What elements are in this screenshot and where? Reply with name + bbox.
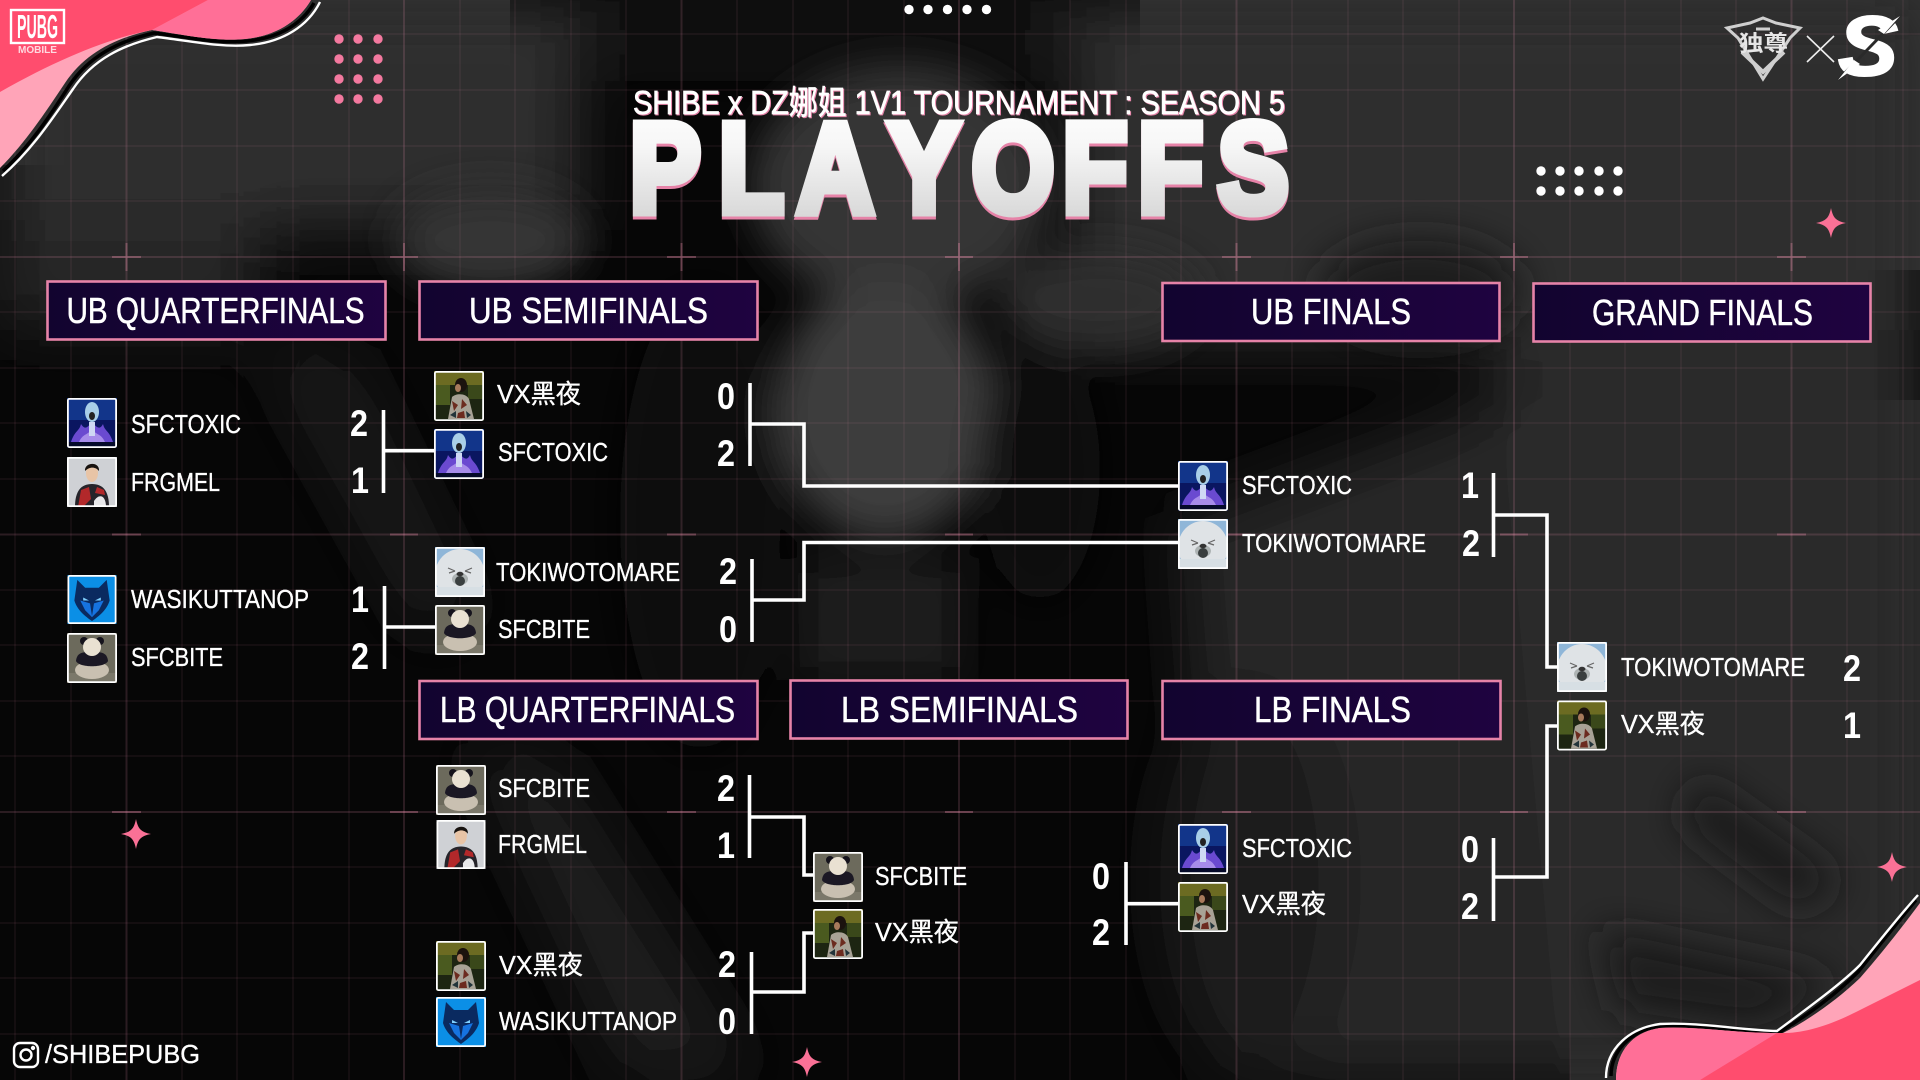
player row: SFCTOXIC: 0 xyxy=(1461,829,1479,870)
player row: TOKIWOTOMARE xyxy=(1178,519,1480,573)
match: LB semifinal xyxy=(813,852,1110,959)
heading: UB Quarterfinals xyxy=(48,282,386,340)
player row: TOKIWOTOMARE: TOKIWOTOMARE xyxy=(1621,652,1805,682)
player row: SFCBITE: 0 xyxy=(1092,856,1110,897)
player row: SFCTOXIC: SFCTOXIC xyxy=(498,437,608,467)
player row: VX黑夜 xyxy=(813,909,1110,959)
match: LB quarterfinal 2 xyxy=(436,941,736,1047)
pink dot grid xyxy=(334,34,383,104)
match: UB quarterfinal 2 xyxy=(67,575,369,683)
player row: SFCBITE: 2 xyxy=(351,636,369,677)
player row: FRGMEL: FRGMEL xyxy=(131,467,220,497)
player row: VX黑夜: 0 xyxy=(717,376,735,417)
player row: VX黑夜: 2 xyxy=(1092,912,1110,953)
logos top-right xyxy=(1727,0,1900,93)
bracket connector lines xyxy=(384,383,1557,1034)
heading: PLAYOFFS shadow and face: PLAYOFFS xyxy=(630,98,1289,239)
player row: VX黑夜: 2 xyxy=(1461,886,1479,927)
player row: WASIKUTTANOP: WASIKUTTANOP xyxy=(499,1006,677,1036)
social handle xyxy=(14,1039,200,1069)
heading: Grand Finals: GRAND FINALS xyxy=(1592,292,1813,333)
player row: FRGMEL: 1 xyxy=(717,825,735,866)
player row: SFCTOXIC: 2 xyxy=(350,403,368,444)
player row: SFCBITE: SFCBITE xyxy=(498,614,590,644)
player row: SFCTOXIC: SFCTOXIC xyxy=(131,409,241,439)
player row: FRGMEL: 1 xyxy=(351,460,369,501)
infographic canvas: PUBG xyxy=(17,8,58,45)
icon: instagram xyxy=(14,1043,38,1067)
player row: SFCBITE: SFCBITE xyxy=(498,773,590,803)
player row: WASIKUTTANOP xyxy=(68,575,369,624)
heading: LB Quarterfinals xyxy=(420,681,758,739)
white dot grid right xyxy=(1536,166,1623,196)
handle text: /SHIBEPUBG xyxy=(45,1039,200,1069)
match: UB semifinal 2 xyxy=(435,547,737,655)
player row: VX黑夜: VX黑夜 xyxy=(1621,709,1705,739)
white dots top xyxy=(904,5,991,14)
match: UB semifinal 1 xyxy=(434,371,735,479)
player row: WASIKUTTANOP: WASIKUTTANOP xyxy=(131,584,309,614)
player row: VX黑夜: VX黑夜 xyxy=(499,950,583,980)
player row: SFCBITE: 0 xyxy=(719,609,737,650)
player row: TOKIWOTOMARE: 2 xyxy=(719,551,737,592)
heading: UB Finals xyxy=(1162,283,1500,341)
heading boxes xyxy=(48,282,1870,739)
player row: FRGMEL xyxy=(436,820,735,869)
player row: VX黑夜 xyxy=(434,371,735,421)
player row: VX黑夜 xyxy=(1178,882,1479,932)
heading: LB Finals xyxy=(1162,681,1500,739)
player row: SFCBITE xyxy=(67,633,369,683)
player row: SFCTOXIC xyxy=(67,398,368,448)
heading: UB Finals: UB FINALS xyxy=(1251,291,1411,332)
match: UB quarterfinal 1 xyxy=(67,398,369,507)
player row: TOKIWOTOMARE: 2 xyxy=(1843,648,1861,689)
player row: SFCTOXIC xyxy=(1178,824,1479,874)
heading: LB Semifinals: LB SEMIFINALS xyxy=(841,689,1078,730)
icon: S logo: S xyxy=(1838,0,1898,93)
icon: emblem xyxy=(1727,18,1800,79)
heading: UB Semifinals xyxy=(420,282,758,340)
heading: PLAYOFFS shadow and face: PLAYOFFS xyxy=(630,101,1289,242)
corner wave bottom-right xyxy=(1606,895,1920,1080)
player row: SFCBITE xyxy=(435,605,737,655)
player row: VX黑夜 xyxy=(1557,700,1861,750)
player row: VX黑夜: 1 xyxy=(1843,705,1861,746)
heading: Grand Finals xyxy=(1534,284,1870,342)
match: UB final xyxy=(1178,461,1480,573)
player row: VX黑夜 xyxy=(436,941,736,991)
player row: FRGMEL: FRGMEL xyxy=(498,829,587,859)
player row: FRGMEL xyxy=(67,457,369,507)
player row: VX黑夜: VX黑夜 xyxy=(875,917,959,947)
player row: SFCTOXIC: 1 xyxy=(1461,465,1479,506)
player row: SFCBITE xyxy=(813,852,1110,902)
heading: UB Semifinals: UB SEMIFINALS xyxy=(469,290,708,331)
sparkle stars xyxy=(121,208,1907,1077)
title block xyxy=(630,84,1289,242)
player row: SFCTOXIC xyxy=(434,429,735,479)
heading: UB Quarterfinals: UB QUARTERFINALS xyxy=(66,290,364,331)
player row: SFCTOXIC: 2 xyxy=(717,433,735,474)
player row: TOKIWOTOMARE: TOKIWOTOMARE xyxy=(496,557,680,587)
heading: LB Semifinals xyxy=(790,680,1128,738)
player row: WASIKUTTANOP: 1 xyxy=(351,579,369,620)
player row: TOKIWOTOMARE: TOKIWOTOMARE xyxy=(1242,528,1426,558)
player row: SFCBITE xyxy=(436,765,735,815)
corner wave top-left xyxy=(0,0,320,176)
logo: PUBG Mobile: MOBILE xyxy=(18,45,57,56)
logo: PUBG Mobile xyxy=(11,8,64,56)
player row: VX黑夜: VX黑夜 xyxy=(1242,889,1326,919)
match: grand final xyxy=(1557,642,1861,750)
player row: TOKIWOTOMARE: 2 xyxy=(1462,523,1480,564)
player row: SFCBITE: SFCBITE xyxy=(875,861,967,891)
icon: times sign xyxy=(1807,36,1834,62)
heading: LB Finals: LB FINALS xyxy=(1254,689,1411,730)
player row: TOKIWOTOMARE xyxy=(435,547,737,601)
player row: SFCTOXIC: SFCTOXIC xyxy=(1242,833,1352,863)
match: LB final xyxy=(1178,824,1479,932)
heading: LB Quarterfinals: LB QUARTERFINALS xyxy=(440,689,735,730)
player row: VX黑夜: VX黑夜 xyxy=(497,379,581,409)
player row: SFCBITE: SFCBITE xyxy=(131,642,223,672)
player row: SFCTOXIC: SFCTOXIC xyxy=(1242,470,1352,500)
player row: SFCTOXIC xyxy=(1178,461,1479,511)
player row: VX黑夜: 2 xyxy=(718,944,736,985)
player row: WASIKUTTANOP: 0 xyxy=(718,1001,736,1042)
icon: emblem: 独尊 xyxy=(1739,31,1788,56)
match: LB quarterfinal 1 xyxy=(436,765,735,869)
subtitle: SHIBE x DZ娜姐 1V1 TOURNAMENT : SEASON 5 xyxy=(633,84,1285,121)
player row: SFCBITE: 2 xyxy=(717,768,735,809)
player row: WASIKUTTANOP xyxy=(436,997,736,1047)
player row: TOKIWOTOMARE xyxy=(1557,642,1861,696)
